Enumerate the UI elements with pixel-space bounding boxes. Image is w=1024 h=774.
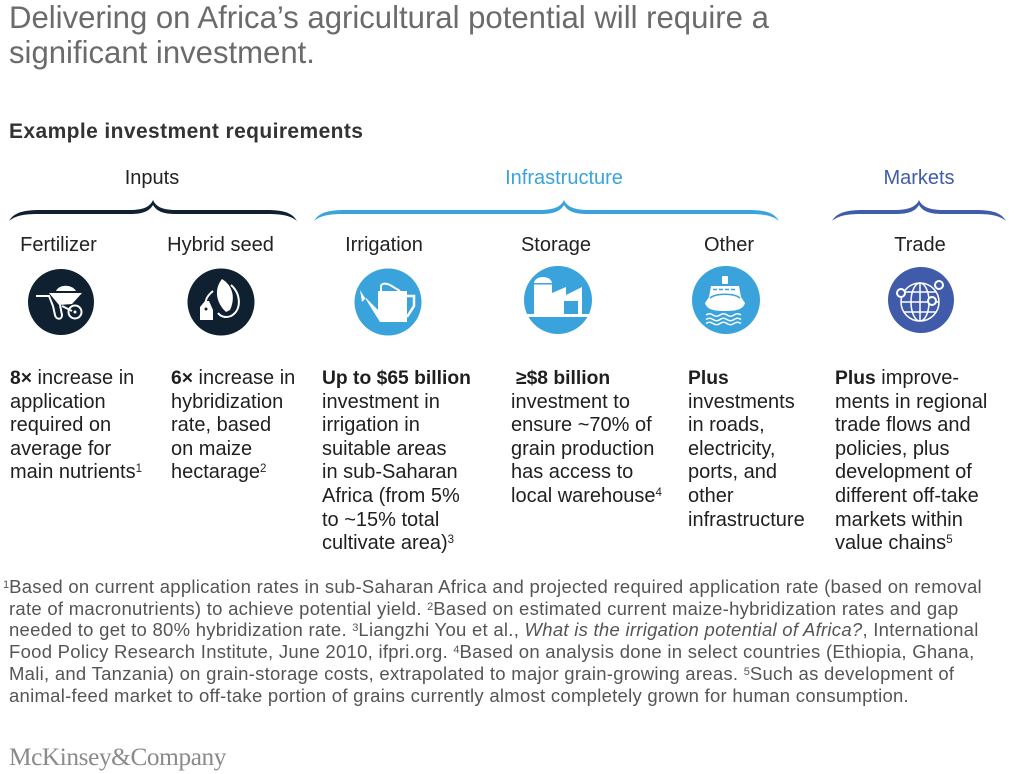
title: Delivering on Africa’s agricultural potential will require a [9,0,769,35]
text: storage: grain production [511,438,654,460]
footnotes [3,576,982,706]
text: irrigation: cultivate area)3 [322,532,454,554]
text: trade: value chains5 [835,532,953,554]
text: hybrid seed: hectarage2 [171,461,266,483]
text: hybrid seed: hybridization [171,391,283,413]
title: significant investment. [9,35,315,70]
text: trade: markets within [835,509,963,531]
text: storage: local warehouse4 [511,485,662,507]
text: fertilizer: application [10,391,106,413]
subtitle: Example investment requirements [9,120,363,143]
column heading: Irrigation: Irrigation [345,234,423,256]
column heading: Fertilizer: Fertilizer [20,234,97,256]
footnotes: animal-feed market to off-take portion of grains currently almost completely grown for human consumption. [9,685,909,706]
text: fertilizer: required on [10,414,111,436]
footnotes: rate of macronutrients) to achieve potential yield. 2Based on estimated current maize-hybridization rates and gap [9,598,959,619]
column heading: Other: Other [704,234,754,256]
text: other: ports, and [688,461,777,483]
text: hybrid seed: rate, based [171,414,271,436]
text: fertilizer: average for [10,438,111,460]
footnotes: Mali, and Tanzania) on grain-storage costs, extrapolated to major grain-growing areas. 5Such as development of [9,663,954,684]
text: storage: has access to [511,461,633,483]
text: trade: Plus improve- [835,367,959,389]
group label: Infrastructure: Infrastructure [505,167,623,189]
text: irrigation: investment in [322,391,440,413]
text: other: other [688,485,734,507]
text: trade: ments in regional [835,391,987,413]
text: other [688,368,805,531]
text: trade [835,367,987,554]
text: irrigation [322,368,471,554]
text: storage: ≥$8 billion [516,368,610,389]
text: fertilizer: main nutrients1 [10,461,142,483]
text: other: infrastructure [688,509,805,531]
text: other: investments [688,391,795,413]
text: storage [511,368,662,507]
text: other: in roads, [688,414,765,436]
column heading: Trade: Trade [894,234,946,256]
text: irrigation: suitable areas [322,438,447,460]
text: hybrid seed: on maize [171,438,252,460]
text: storage: investment to [511,391,630,413]
text: trade: different off-take [835,485,979,507]
text: irrigation: to ~15% total [322,509,439,531]
text: hybrid seed: 6× increase in [171,367,295,389]
column heading: Hybrid seed: Hybrid seed [167,234,274,256]
group label: Inputs: Inputs [125,167,179,189]
text: irrigation: irrigation in [322,414,420,436]
text: fertilizer [10,367,142,483]
group label: Markets: Markets [883,167,955,189]
text: storage: ensure ~70% of [511,414,652,436]
column heading: Storage: Storage [521,234,591,256]
text: other: Plus [688,368,729,389]
text: irrigation: in sub-Saharan [322,461,458,483]
text: other: electricity, [688,438,775,460]
text: trade: development of [835,461,972,483]
text: irrigation: Africa (from 5% [322,485,460,507]
text: irrigation: Up to $65 billion [322,368,471,389]
text: trade: policies, plus [835,438,950,460]
text: fertilizer: 8× increase in [10,367,134,389]
text: hybrid seed [171,367,295,483]
footnotes: 1Based on current application rates in sub-Saharan Africa and projected required application rate (based on removal [3,576,982,597]
footnotes: Food Policy Research Institute, June 2010, ifpri.org. 4Based on analysis done in select countries (Ethiopia, Ghana, [9,641,975,662]
text: trade: trade flows and [835,414,971,436]
title [9,0,769,70]
footnotes: needed to get to 80% hybridization rate. 3Liangzhi You et al., What is the irrigation potential of Africa?, International [9,619,979,640]
logo: McKinsey & Company: McKinsey&Company [9,743,226,771]
